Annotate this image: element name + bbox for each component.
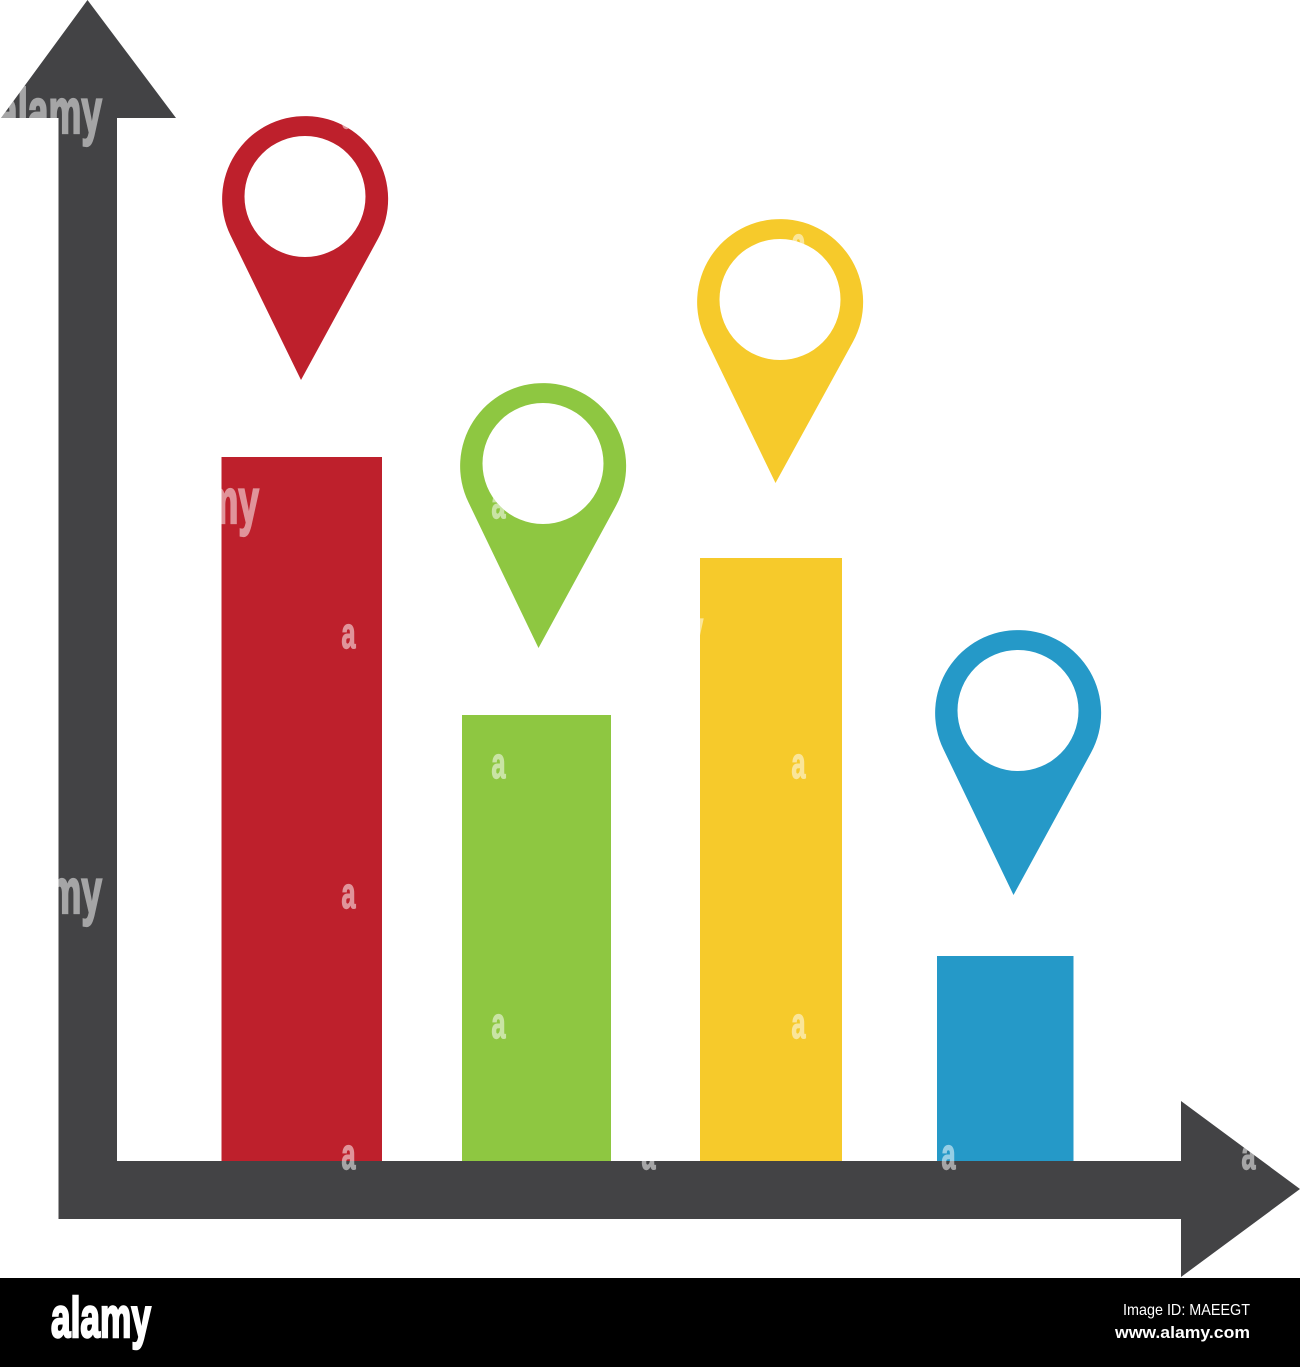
footer bar	[0, 1278, 1300, 1367]
bar: blue	[937, 956, 1074, 1161]
watermark text on shapes: alamy	[154, 467, 259, 537]
watermark text on shapes: alamy	[598, 597, 703, 667]
icon: green map pin	[460, 383, 626, 648]
watermark text on shapes: a	[792, 219, 806, 268]
image id: Image ID: MAEEGT	[1123, 1302, 1250, 1319]
watermark text on shapes: a	[792, 999, 806, 1048]
website: www.alamy.com	[1114, 1323, 1250, 1342]
footer logo: alamy	[51, 1286, 151, 1350]
icon: red map pin	[222, 116, 388, 380]
icon: blue map pin	[935, 630, 1101, 895]
watermark text on shapes: a	[342, 869, 356, 918]
watermark text on shapes: a	[792, 739, 806, 788]
watermark text on shapes: a	[942, 1130, 956, 1179]
bar: green	[462, 715, 611, 1161]
watermark text on shapes: a	[492, 739, 506, 788]
watermark text on shapes: alamy	[0, 857, 102, 927]
watermark text on shapes: a	[642, 1130, 656, 1179]
watermark text on shapes	[0, 77, 1256, 1179]
bar: red	[222, 457, 382, 1161]
watermark text on shapes: a	[342, 609, 356, 658]
watermark text on shapes: alamy	[0, 77, 102, 147]
bar: yellow	[700, 558, 842, 1161]
watermark text on shapes: a	[1242, 1130, 1256, 1179]
watermark text on shapes: a	[492, 999, 506, 1048]
icon: yellow map pin	[697, 219, 863, 483]
watermark text on shapes: a	[492, 479, 506, 528]
watermark text on shapes: a	[342, 89, 356, 138]
watermark text on shapes: a	[342, 1130, 356, 1179]
